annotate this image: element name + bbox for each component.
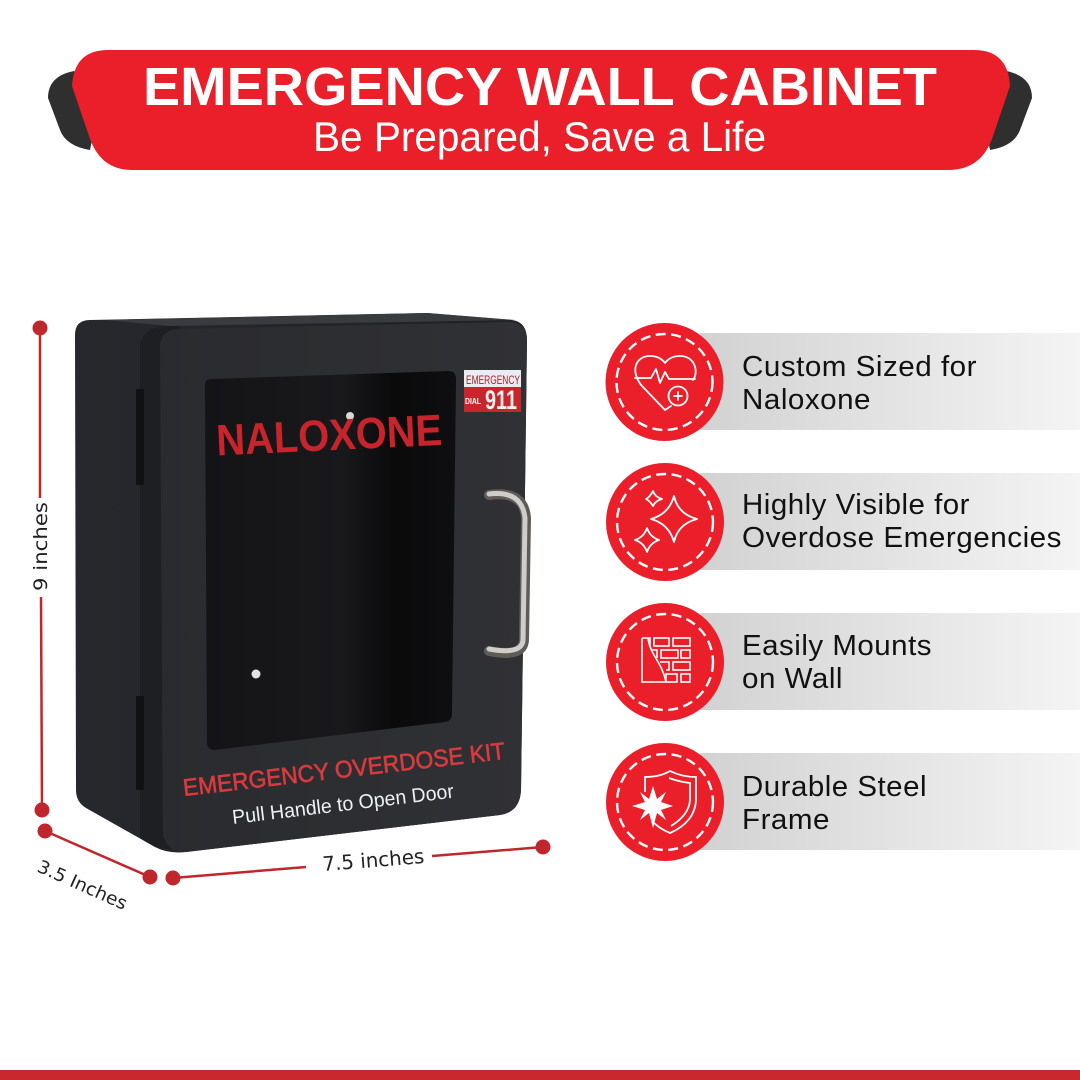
subtitle: Be Prepared, Save a Life	[313, 113, 766, 160]
naloxone label: NALOXONE	[215, 406, 443, 465]
feature text: Easily Mounts	[742, 630, 932, 662]
feature text: Naloxone	[742, 384, 871, 416]
badge dashed ring	[617, 754, 713, 850]
window	[205, 371, 456, 750]
sticker dial text: DIAL	[465, 397, 481, 406]
icon badge circle	[606, 463, 724, 581]
icon badge circle	[606, 603, 724, 721]
cabinet product photo	[75, 313, 527, 852]
sticker white part	[464, 370, 521, 388]
depth label: 3.5 Inches	[34, 856, 130, 915]
icon: brick wall	[642, 638, 690, 682]
depth line	[45, 831, 150, 877]
banner red shape	[72, 50, 1010, 170]
width right dot	[536, 840, 550, 854]
pull handle text: Pull Handle to Open Door	[231, 781, 455, 829]
feature text: Custom Sized for	[742, 351, 977, 383]
width line	[173, 847, 543, 878]
badge dashed ring	[617, 614, 713, 710]
feature: custom sized	[606, 323, 1080, 441]
feature bar	[700, 473, 1080, 570]
height bottom dot	[34, 802, 50, 818]
bottom hinge	[136, 696, 144, 790]
feature bar	[700, 333, 1080, 430]
emergency overdose kit text: EMERGENCY OVERDOSE KIT	[182, 738, 507, 802]
icon: sparkles	[635, 491, 697, 552]
feature text: Highly Visible for	[742, 489, 970, 521]
door handle	[489, 494, 526, 653]
title: EMERGENCY WALL CABINET	[143, 57, 937, 117]
feature: mounts on wall	[606, 603, 1080, 721]
depth right dot	[142, 870, 158, 884]
top hinge	[136, 389, 144, 485]
height top dot	[32, 320, 48, 336]
emergency 911 sticker	[464, 370, 521, 415]
door hinge strip	[140, 326, 180, 850]
icon badge circle	[606, 323, 724, 441]
banner right dark tab	[980, 71, 1032, 150]
dimension: height	[30, 320, 52, 818]
icon badge circle	[606, 743, 724, 861]
feature text: Frame	[742, 804, 830, 836]
icon: shield with impact star	[632, 771, 696, 833]
depth left dot	[38, 824, 52, 838]
height line	[40, 328, 42, 810]
badge dashed ring	[617, 474, 713, 570]
banner left dark tab	[48, 71, 100, 150]
feature: highly visible	[606, 463, 1080, 581]
dimension: width	[166, 840, 550, 886]
feature bar	[700, 613, 1080, 710]
feature text: on Wall	[742, 663, 843, 695]
bottom red bar	[0, 1070, 1080, 1080]
height label: 9 inches	[30, 502, 52, 591]
feature: durable steel	[606, 743, 1080, 861]
cabinet body	[75, 313, 527, 852]
window white dot lower	[252, 670, 260, 678]
door face	[160, 322, 527, 852]
badge dashed ring	[616, 334, 712, 430]
icon: heart with pulse and plus	[635, 356, 696, 410]
width left dot	[166, 870, 180, 886]
feature bar	[700, 753, 1080, 850]
sticker emergency text: EMERGENCY	[466, 373, 520, 387]
feature text: Overdose Emergencies	[742, 522, 1062, 554]
header banner	[48, 50, 1032, 170]
width label: 7.5 inches	[322, 844, 425, 876]
dimension: depth	[34, 824, 158, 915]
sticker 911 text: 911	[485, 385, 517, 415]
feature text: Durable Steel	[742, 771, 927, 803]
sticker red part	[464, 387, 521, 412]
cabinet top face	[105, 313, 515, 326]
window white dot upper	[346, 412, 354, 420]
